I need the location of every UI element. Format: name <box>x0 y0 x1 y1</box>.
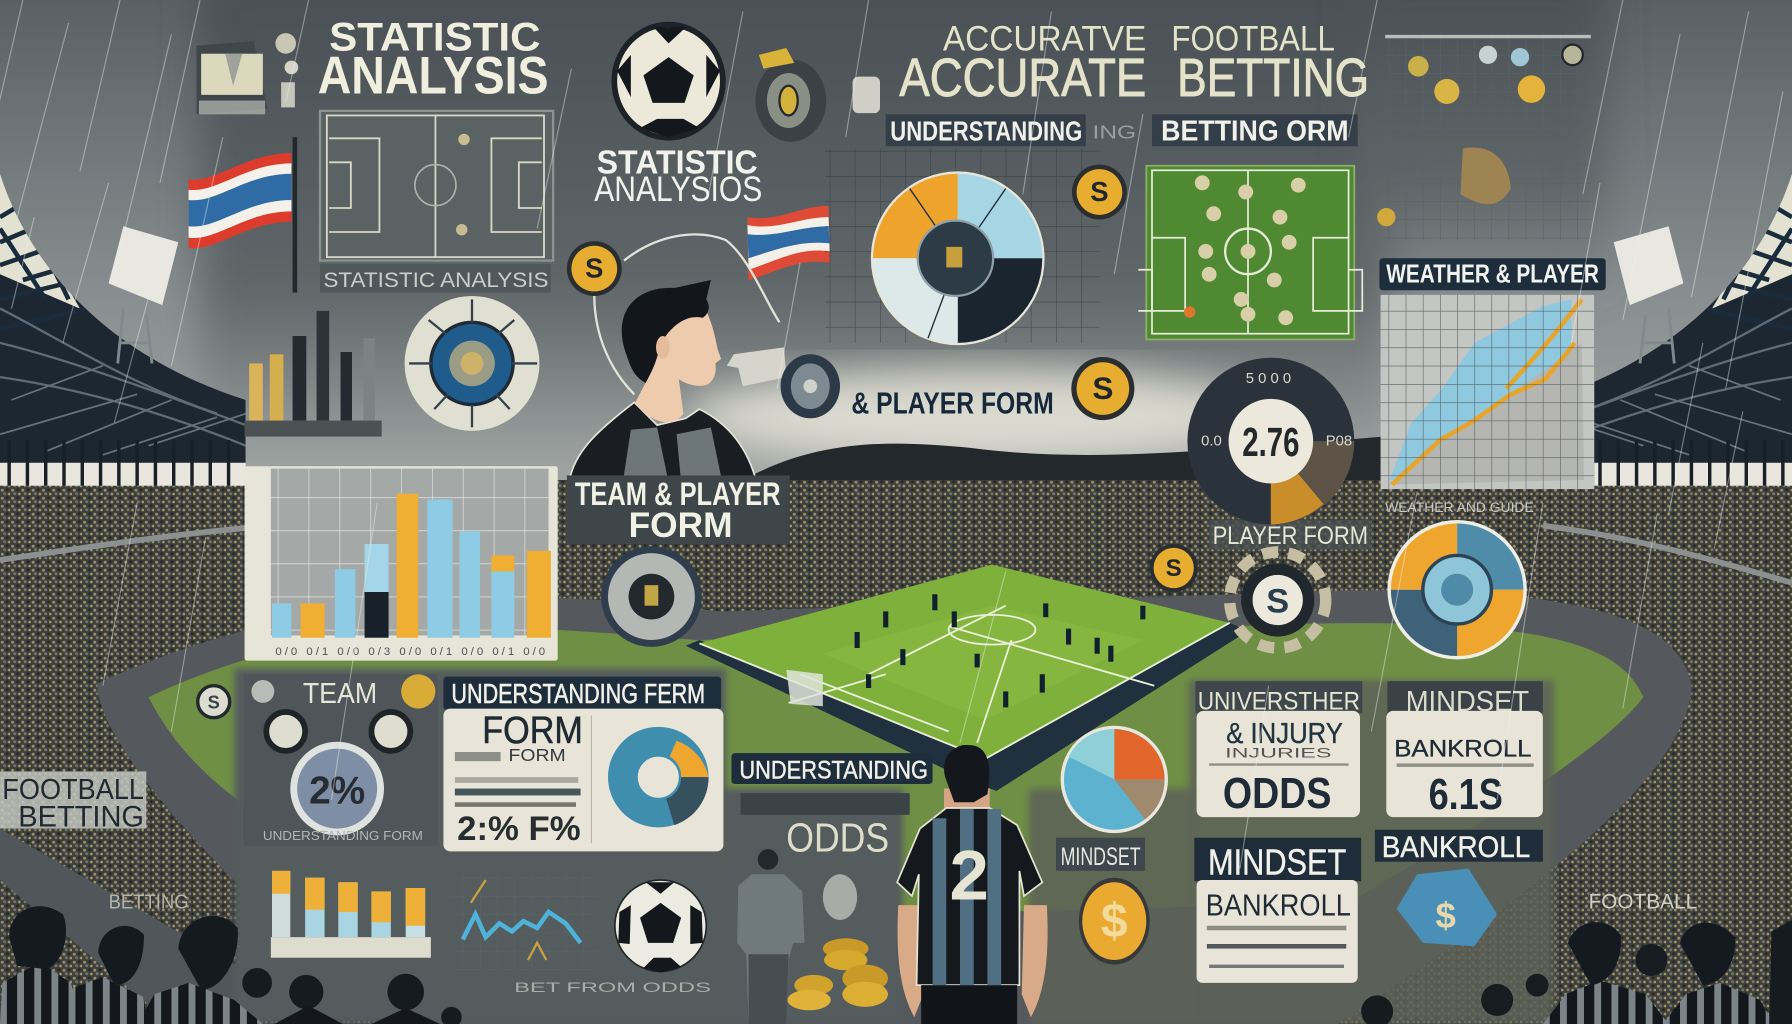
panel: statistic analysis title: ANALYSIS <box>318 47 549 106</box>
icon: coin s upper <box>1072 165 1127 219</box>
icon: money bag <box>1397 869 1497 946</box>
panel: bar chart: 0/0 0/1 0/0 0/3 0/0 0/1 0/0 0/1 0/0 <box>275 646 545 658</box>
dial: percent gauge: 0.0 <box>1201 434 1222 450</box>
label: understanding odds: UNDERSTANDING <box>739 756 928 784</box>
label: player form: PLAYER FORM <box>1213 522 1368 550</box>
panel: injury odds card: UNIVERSTHER <box>1198 688 1360 716</box>
label: team & player form: FORM <box>629 505 733 545</box>
floodlight right <box>1614 226 1683 363</box>
panel: mindset bankroll card: 6.1S <box>1429 771 1503 819</box>
label: statistic analysis: STATISTIC ANALYSIS <box>323 267 549 292</box>
central football pitch <box>686 565 1248 791</box>
icon: speech bubble and disc <box>727 347 840 418</box>
panel: team: UNDERSTANDING FORM <box>263 829 423 843</box>
radial dial: statistic <box>405 296 539 431</box>
heading: statistic analysios: ANALYSIOS <box>594 169 762 209</box>
label: understanding odds <box>731 753 933 815</box>
panel: injury odds card: ODDS <box>1223 770 1331 818</box>
dial: percent gauge: 5 0 0 0 <box>1246 371 1291 387</box>
spectators right <box>1361 920 1792 1024</box>
label: football betting: BETTING <box>18 800 144 833</box>
icon: coin s mid <box>1150 544 1198 592</box>
icon: gear s: S <box>1266 583 1289 621</box>
icon: gold coin stack <box>787 938 888 1010</box>
main title: FOOTBALL <box>1171 18 1335 58</box>
small text: bet from odds: BET FROM ODDS <box>514 980 711 995</box>
label: team & player form: TEAM & PLAYER <box>575 476 781 512</box>
label: understanding: ING <box>1093 121 1136 142</box>
radial chart: segmented wheel <box>1387 520 1527 659</box>
icon: soccer ball large <box>611 22 726 141</box>
panel: mindset large card <box>1194 838 1361 983</box>
spectators left <box>0 906 462 1024</box>
text: football faint: FOOTBALL <box>1589 889 1697 914</box>
panel: bar chart <box>245 466 558 661</box>
heading: statistic analysios <box>594 145 762 209</box>
panel: injury odds card <box>1195 681 1362 818</box>
line chart: blue <box>451 874 598 971</box>
icon: s badge left: S <box>208 692 220 713</box>
text: odds: ODDS <box>786 814 889 860</box>
panel: form card: FORM <box>509 745 566 765</box>
label: weather & player: WEATHER & PLAYER <box>1386 258 1599 288</box>
text: & player form: & PLAYER FORM <box>851 386 1054 421</box>
panel: mindset bankroll card: MINDSET <box>1406 686 1529 718</box>
icon: thai flag small <box>747 206 830 280</box>
panel: mindset bankroll card <box>1386 681 1543 819</box>
green formation pitch <box>1138 166 1362 339</box>
label: football betting: FOOTBALL <box>2 774 144 806</box>
bar chart: stacked mini <box>271 871 431 958</box>
label: understanding: UNDERSTANDING <box>890 116 1082 147</box>
label: mindset small <box>1056 838 1145 871</box>
icon: soccer ball lower <box>615 880 706 973</box>
dial: percent gauge: P08 <box>1326 434 1352 450</box>
panel: statistic analysis title: STATISTIC <box>329 15 541 59</box>
label: team & player form <box>567 475 790 545</box>
main title: ACCURATE <box>899 48 1146 108</box>
area chart: weather <box>1381 295 1594 489</box>
label: football betting <box>0 771 146 833</box>
panel: form card: 2:% F% <box>457 810 581 848</box>
icon: dollar coin <box>1079 878 1150 965</box>
label: understanding ferm: UNDERSTANDING FERM <box>451 678 705 709</box>
figure: player from behind: 2 <box>949 836 989 915</box>
panel: mindset bankroll card: BANKROLL <box>1394 736 1531 763</box>
grid panel: upper right <box>1377 34 1591 240</box>
heading: statistic analysios: STATISTIC <box>597 145 758 182</box>
small text: under chart: WEATHER AND GUIDE <box>1385 500 1534 515</box>
panel: injury odds card: INJURIES <box>1225 746 1331 761</box>
icon: s badge left <box>198 686 230 718</box>
panel: mindset large card: MINDSET <box>1208 841 1346 882</box>
figure: player from behind <box>897 745 1048 1024</box>
label: mindset small: MINDSET <box>1061 843 1141 871</box>
icon: thai flag large <box>189 137 297 293</box>
main title: BETTING <box>1177 48 1369 108</box>
icon: speaker gadget <box>755 48 880 142</box>
figure: player portrait <box>569 280 757 482</box>
pitch diagram <box>320 111 553 261</box>
bar chart: small dark <box>245 311 382 437</box>
connector curves <box>594 234 779 394</box>
panel: team <box>243 674 438 846</box>
panel: team: TEAM <box>303 678 377 710</box>
dial: percent gauge <box>1187 358 1354 525</box>
main title <box>899 18 1369 108</box>
large pie chart <box>825 149 1099 345</box>
stadium roof left <box>0 171 246 486</box>
panel: statistic analysis title <box>318 15 549 106</box>
panel: form card: FORM <box>482 709 583 751</box>
floodlight left <box>109 226 178 363</box>
panel: team: 2% <box>309 769 365 812</box>
radial dial: team form <box>601 546 702 647</box>
icon: dollar coin: $ <box>1101 895 1128 948</box>
label: betting orm: BETTING ORM <box>1161 116 1349 148</box>
label: bankroll: BANKROLL <box>1382 831 1530 864</box>
stadium roof right <box>1546 171 1792 486</box>
mini pie chart <box>1061 726 1168 833</box>
panel: form card <box>443 709 723 851</box>
main title: ACCURATVE <box>943 18 1146 58</box>
icon: coin s lower <box>1071 357 1134 420</box>
dial: percent gauge: 2.76 <box>1242 419 1299 465</box>
icon: money bag: $ <box>1436 895 1456 936</box>
icon: gear s <box>1230 552 1326 648</box>
panel: injury odds card: & INJURY <box>1226 718 1343 750</box>
icon: coin s left <box>567 241 622 296</box>
panel: mindset large card: BANKROLL <box>1206 887 1351 922</box>
icon: clipboard <box>197 33 298 114</box>
figure: grey referee <box>737 849 857 1024</box>
text: betting faint: BETTING <box>109 891 189 914</box>
